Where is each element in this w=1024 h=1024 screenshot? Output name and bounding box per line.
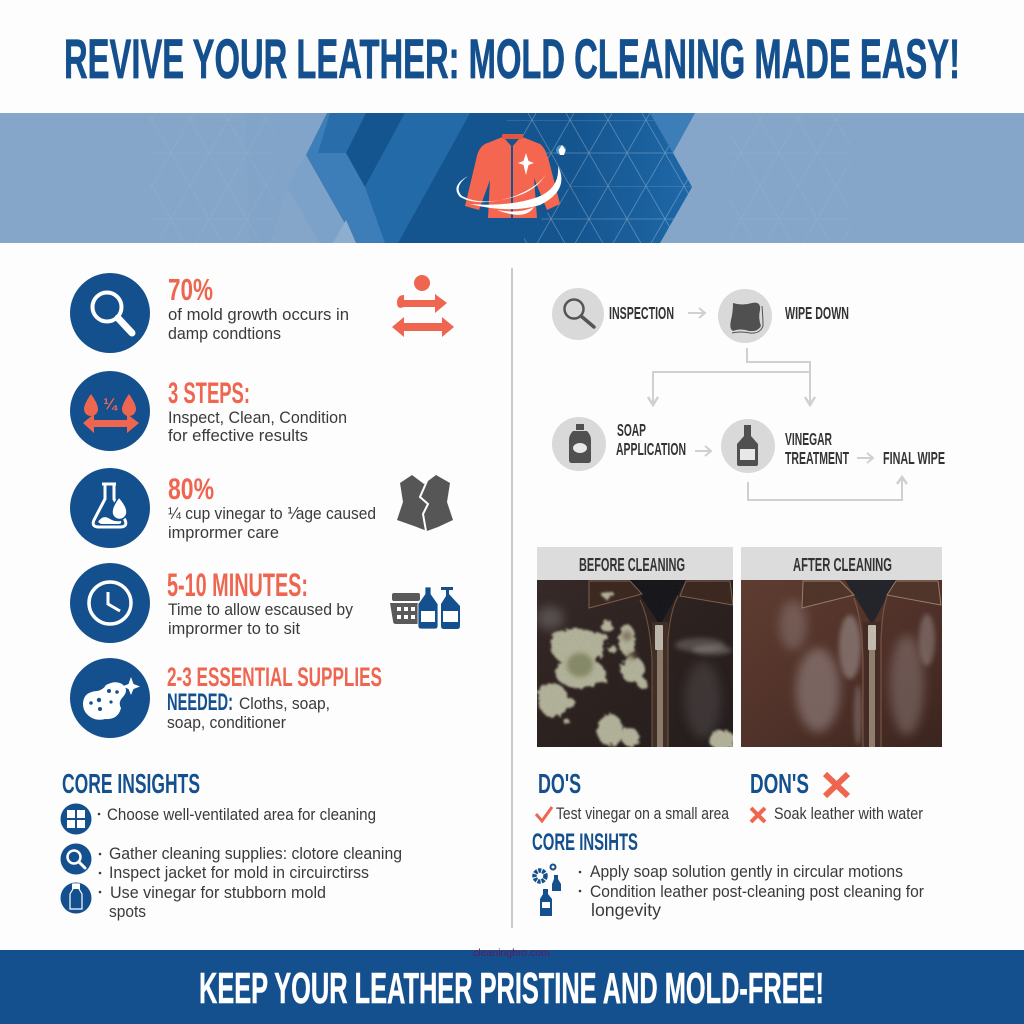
photo: moldy jacket (536, 580, 735, 750)
stat row 5: supplies: 2-3 ESSENTIAL SUPPLIES (167, 662, 382, 692)
stat row 5: supplies: Cloths, soap, (239, 695, 330, 713)
icon: check (536, 807, 552, 821)
stat row 3: 80% (70, 468, 453, 548)
step: vinegar treatment (721, 419, 849, 473)
icon: big cross (825, 774, 848, 796)
icon: drops and fraction: ¼ (103, 396, 118, 413)
core insights left: spots (109, 903, 146, 921)
icon: drops and fraction (70, 371, 150, 451)
panel: don's: DON'S (750, 768, 809, 799)
core insights left: Inspect jacket for mold in circuirctirss (109, 864, 369, 882)
icon: gears and bottles (534, 864, 561, 916)
step: soap application: SOAP (617, 420, 646, 440)
stat row 2: 3 steps: 3 STEPS: (168, 377, 250, 410)
icon: window (60, 804, 92, 834)
stat row 2: 3 steps (70, 371, 347, 451)
banner (0, 113, 1024, 243)
website credit: cleaningbro.com (473, 947, 550, 959)
step: inspection (552, 288, 674, 340)
stat row 5: supplies: NEEDED: (167, 689, 233, 716)
icon: small bottle (60, 882, 92, 914)
panel: after cleaning: AFTER CLEANING (793, 555, 892, 575)
core insights right: Apply soap solution gently in circular motions (590, 863, 903, 881)
step: inspection: INSPECTION (609, 303, 674, 323)
icon: cracked leather (397, 475, 453, 531)
core insights right: longevity (591, 900, 661, 920)
stat row 4: minutes: Time to allow escaused by (168, 601, 354, 619)
stat row 3: 80%: 80% (168, 473, 214, 506)
panel: before cleaning: BEFORE CLEANING (579, 555, 685, 575)
icon: coral arrows (392, 275, 454, 337)
stat row 1: 70%: of mold growth occurs in (168, 306, 349, 324)
panel: do's: DO'S (538, 768, 581, 799)
core insights left: Gather cleaning supplies: clotore cleaning (109, 845, 402, 863)
stat row 2: 3 steps: for effective results (168, 427, 308, 445)
core insights right: Condition leather post-cleaning post cleaning for (590, 883, 924, 901)
panel: don's: Soak leather with water (774, 805, 923, 823)
stat row 4: minutes: imprormer to to sit (168, 620, 300, 638)
step: soap application: APPLICATION (616, 439, 686, 459)
core insights right: CORE INSIHTS (532, 829, 638, 856)
core insights left: CORE INSIGHTS (62, 768, 200, 799)
step: vinegar treatment: TREATMENT (785, 448, 849, 468)
stat row 1: 70%: damp condtions (168, 325, 281, 343)
stat row 5: supplies: soap, conditioner (167, 714, 286, 732)
core insights right (532, 829, 924, 920)
core insights left (60, 768, 402, 921)
step: final wipe: FINAL WIPE (883, 448, 945, 468)
stat row 4: minutes (70, 563, 460, 643)
step: wipe down: WIPE DOWN (785, 303, 849, 323)
panel: do's: Test vinegar on a small area (556, 805, 730, 823)
icon: clock (70, 563, 150, 643)
process flow (552, 288, 945, 500)
icon: magnifier (70, 273, 150, 353)
core insights left: Use vinegar for stubborn mold (110, 884, 326, 902)
panel: don's (750, 768, 923, 823)
step: vinegar treatment: VINEGAR (785, 429, 832, 449)
stat row 1: 70%: 70% (168, 272, 213, 307)
core insights left: Choose well-ventilated area for cleaning (107, 806, 376, 824)
panel: before cleaning (536, 547, 735, 750)
icon: jacket with swoosh (456, 134, 566, 218)
icon: small cross (751, 808, 765, 822)
stat row 1: 70% (70, 272, 454, 353)
stat row 2: 3 steps: Inspect, Clean, Condition (168, 409, 347, 427)
stat row 5: supplies (70, 658, 382, 738)
step: wipe down (718, 289, 849, 343)
footer band (0, 950, 1024, 1024)
photo: clean jacket (741, 580, 942, 747)
panel: do's (536, 768, 730, 823)
stat row 3: 80%: imprormer care (168, 524, 279, 542)
icon: flask (70, 468, 150, 548)
icon: small magnifier (60, 844, 92, 874)
stat row 4: minutes: 5-10 MINUTES: (167, 567, 308, 603)
stat row 3: 80%: ¼ cup vinegar to ⅟age caused (168, 505, 376, 523)
panel: after cleaning (741, 547, 942, 747)
icon: sponge (70, 658, 150, 738)
icon: basket and bottles (390, 587, 460, 629)
step: soap application (552, 417, 686, 471)
